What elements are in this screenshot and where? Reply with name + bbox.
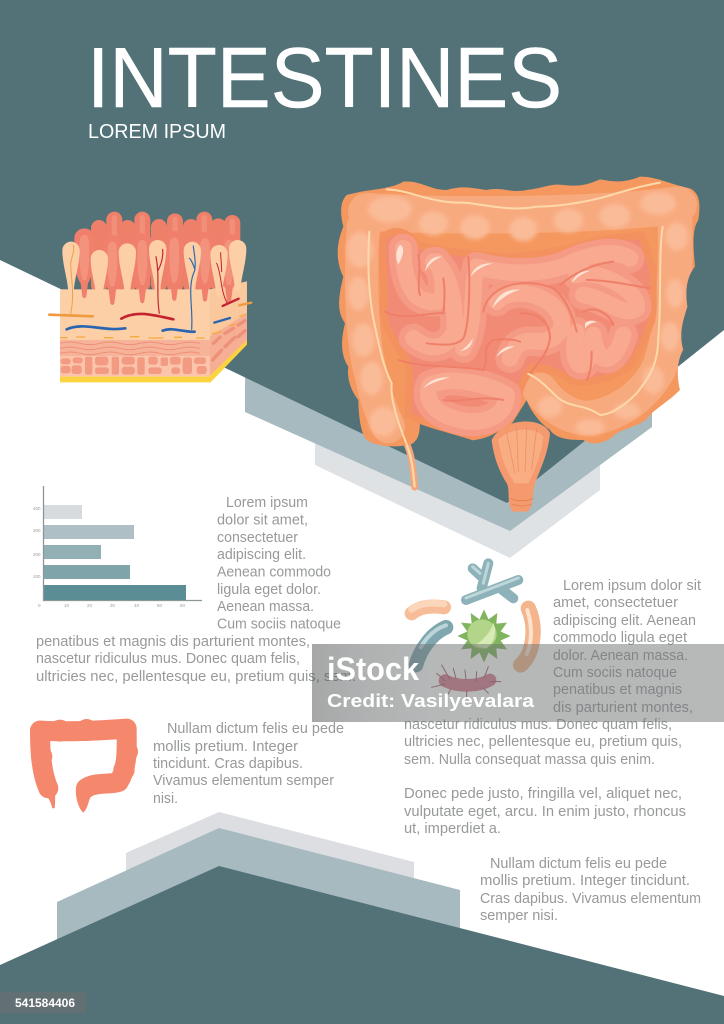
- text block: left lower: mollis pretium. Integer: [153, 739, 298, 755]
- text block: right upper: commodo ligula eget: [553, 630, 687, 646]
- text block: right upper: dis parturient montes,: [553, 700, 693, 716]
- text block: left upper: ligula eget dolor.: [217, 582, 321, 598]
- bottom pale step: [126, 812, 414, 900]
- top pale step: [315, 440, 600, 558]
- loop highlights: [396, 245, 597, 388]
- text block: right lower: semper nisi.: [480, 908, 558, 924]
- loops: mid tone: [403, 248, 637, 422]
- bar chart: [33, 486, 202, 608]
- text block: right lower: Cras dapibus. Vivamus elementum: [480, 891, 701, 907]
- text block: right middle: [404, 786, 686, 837]
- text block: left lower: nisi.: [153, 791, 178, 807]
- text block: left upper: penatibus et magnis dis parturient montes,: [36, 634, 310, 650]
- illustration: bacteria: [412, 563, 533, 698]
- blue Y-shaped bacterium: [466, 563, 518, 600]
- loops: light tone: [403, 248, 637, 422]
- text block: right upper: ultricies nec, pellentesque eu, pretium quis,: [404, 734, 682, 750]
- text block: right upper: penatibus et magnis: [553, 682, 682, 698]
- text block: right upper: [404, 578, 701, 768]
- top teal panel: [0, 0, 724, 503]
- connective layer: [60, 356, 210, 377]
- text block: right upper: sem. Nulla consequat massa quis enim.: [404, 752, 655, 768]
- muscle layer: [60, 340, 210, 357]
- text block: right middle: ut, imperdiet a.: [404, 821, 501, 837]
- axis labels: 300: [33, 528, 41, 533]
- text block: left lower: [153, 721, 344, 807]
- image id tag: [0, 992, 86, 1013]
- text block: right upper: Cum sociis natoque: [553, 665, 677, 681]
- text block: left upper: consectetuer: [217, 530, 298, 546]
- text block: left lower: Nullam dictum felis eu pede: [167, 721, 344, 737]
- text block: left upper: Lorem ipsum: [226, 495, 308, 511]
- text block: left upper: Aenean commodo: [217, 564, 331, 580]
- yellow dashes: [60, 314, 247, 338]
- axis labels: 30: [110, 603, 116, 608]
- axes: [44, 486, 202, 600]
- bars: [44, 505, 82, 519]
- loop creases: [385, 255, 650, 401]
- text block: right upper: nascetur ridiculus mus. Donec quam felis,: [404, 717, 672, 733]
- top mid step: [245, 370, 652, 531]
- green spiked virus: [457, 609, 511, 663]
- axis labels: 10: [64, 603, 70, 608]
- text block: right middle: vulputate eget, arcu. In enim justo, rhoncus: [404, 804, 686, 820]
- block side face: [210, 281, 247, 377]
- text block: right upper: Lorem ipsum dolor sit: [563, 578, 701, 594]
- illustration: large and small intestine: [338, 177, 699, 512]
- text block: right upper: dolor. Aenean massa.: [553, 648, 688, 664]
- text block: left upper: [36, 495, 356, 685]
- text block: right lower: [480, 856, 701, 924]
- text block: right middle: Donec pede justo, fringilla vel, aliquet nec,: [404, 786, 682, 802]
- muscle waves: [60, 342, 200, 355]
- back row villi: [91, 212, 240, 293]
- vessels: [49, 245, 251, 332]
- illustration: intestinal villi cross-section: [49, 212, 251, 382]
- watermark logo: iStock: [327, 651, 419, 687]
- text block: left upper: Cum sociis natoque: [217, 616, 341, 632]
- axis labels: 100: [33, 574, 41, 579]
- title: INTESTINES: [87, 31, 562, 126]
- rectum: [492, 422, 550, 512]
- axis labels: 0: [38, 603, 41, 608]
- axis labels: 40: [134, 603, 140, 608]
- axis labels: 400: [33, 506, 41, 511]
- text block: right lower: mollis pretium. Integer tincidunt.: [480, 873, 690, 889]
- text block: left lower: tincidunt. Cras dapibus.: [153, 756, 303, 772]
- front peach villi: [62, 240, 246, 301]
- axis labels: [33, 506, 186, 608]
- axis labels: 200: [33, 552, 41, 557]
- side muscle: [210, 313, 247, 377]
- peach bacterium top: [412, 603, 444, 613]
- text block: left upper: nascetur ridiculus mus. Donec quam felis,: [36, 651, 300, 667]
- side cells: [213, 321, 245, 360]
- text block: right upper: adipiscing elit. Aenean: [553, 613, 696, 629]
- tissue cells: [61, 357, 207, 375]
- peach bacterium right: [521, 608, 533, 665]
- watermark banner: [312, 644, 724, 722]
- text block: left upper: adipiscing elit.: [217, 547, 306, 563]
- image id tag: 541584406: [15, 998, 75, 1010]
- axis labels: 20: [87, 603, 93, 608]
- watermark credit: Credit: Vasilyevalara: [327, 691, 535, 711]
- middle row villi: [74, 228, 239, 305]
- bottom teal panel: [0, 866, 724, 1024]
- subtitle: LOREM IPSUM: [88, 121, 226, 143]
- block front face: [60, 289, 210, 377]
- icon: colon silhouette: [31, 719, 138, 813]
- bottom mid step: [57, 828, 460, 960]
- text block: left upper: Aenean massa.: [217, 599, 314, 615]
- pink spiked bacterium: [432, 665, 501, 698]
- blue bacterium: [416, 625, 446, 665]
- colon light band and haustra: [347, 192, 688, 436]
- colon outline: [338, 177, 699, 446]
- axis labels: 50: [157, 603, 163, 608]
- text block: right lower: Nullam dictum felis eu pede: [490, 856, 667, 872]
- small intestine base with orange rim: [382, 232, 653, 437]
- appendix: [407, 445, 415, 487]
- text block: left upper: dolor sit amet,: [217, 512, 308, 528]
- text block: right upper: amet, consectetuer: [553, 595, 678, 611]
- teniae cream lines: [368, 183, 663, 446]
- axis labels: 60: [180, 603, 186, 608]
- text block: left upper: ultricies nec, pellentesque eu, pretium quis, sem.: [36, 669, 356, 685]
- text block: left lower: Vivamus elementum semper: [153, 773, 334, 789]
- yellow base: [60, 340, 247, 382]
- small intestine loops: [385, 245, 650, 422]
